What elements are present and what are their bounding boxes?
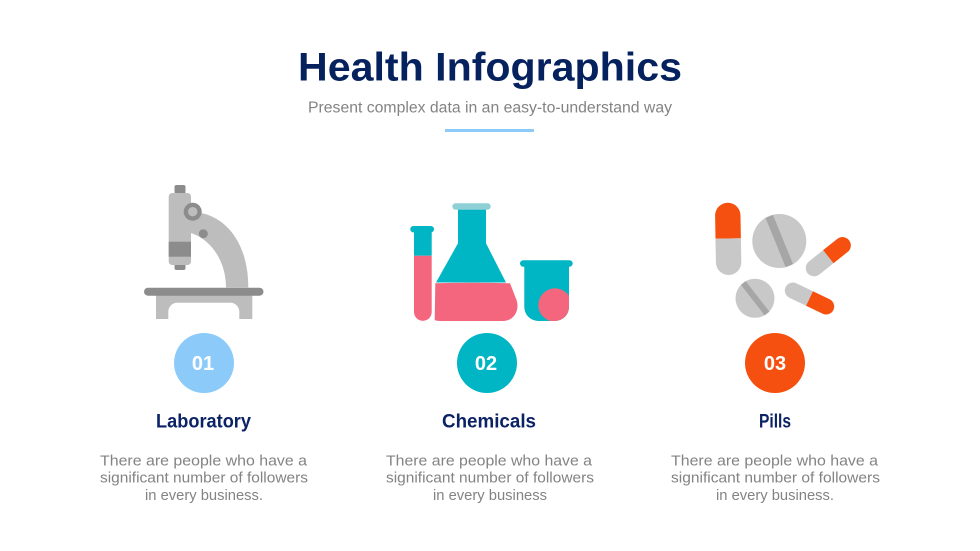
description: Laboratory: in every business. xyxy=(145,487,263,504)
icon: test tube, flask and beaker xyxy=(410,203,573,322)
accent line under subtitle xyxy=(445,129,534,132)
number badge 01: 01 xyxy=(192,353,214,375)
number badge 01 xyxy=(174,333,234,393)
description: Pills xyxy=(671,452,880,504)
description: Chemicals: in every business xyxy=(433,487,547,504)
heading: Chemicals: Chemicals xyxy=(442,412,536,432)
description: Laboratory xyxy=(100,452,308,504)
number badge 02 xyxy=(457,333,517,393)
icon: microscope xyxy=(144,185,264,319)
panel: laboratory xyxy=(100,185,308,504)
panel: chemicals xyxy=(386,203,594,504)
number badge 03: 03 xyxy=(764,353,786,375)
title: Health Infographics xyxy=(298,46,682,90)
description: Pills: in every business. xyxy=(716,487,834,504)
number badge 03 xyxy=(745,333,805,393)
infographic canvas xyxy=(100,52,880,503)
description: Laboratory: There are people who have a xyxy=(100,452,308,470)
icon: pills and capsules xyxy=(715,203,854,318)
description: Laboratory: significant number of followers xyxy=(100,470,308,487)
heading: Laboratory: Laboratory xyxy=(156,412,251,432)
heading: Pills: Pills xyxy=(759,412,791,432)
panel: pills xyxy=(671,203,880,504)
description: Chemicals: There are people who have a xyxy=(386,452,593,470)
description: Pills: significant number of followers xyxy=(671,470,880,487)
description: Chemicals xyxy=(386,452,594,504)
description: Chemicals: significant number of followers xyxy=(386,470,594,487)
description: Pills: There are people who have a xyxy=(671,452,879,470)
subtitle: Present complex data in an easy-to-understand way xyxy=(308,100,672,116)
number badge 02: 02 xyxy=(475,353,497,375)
